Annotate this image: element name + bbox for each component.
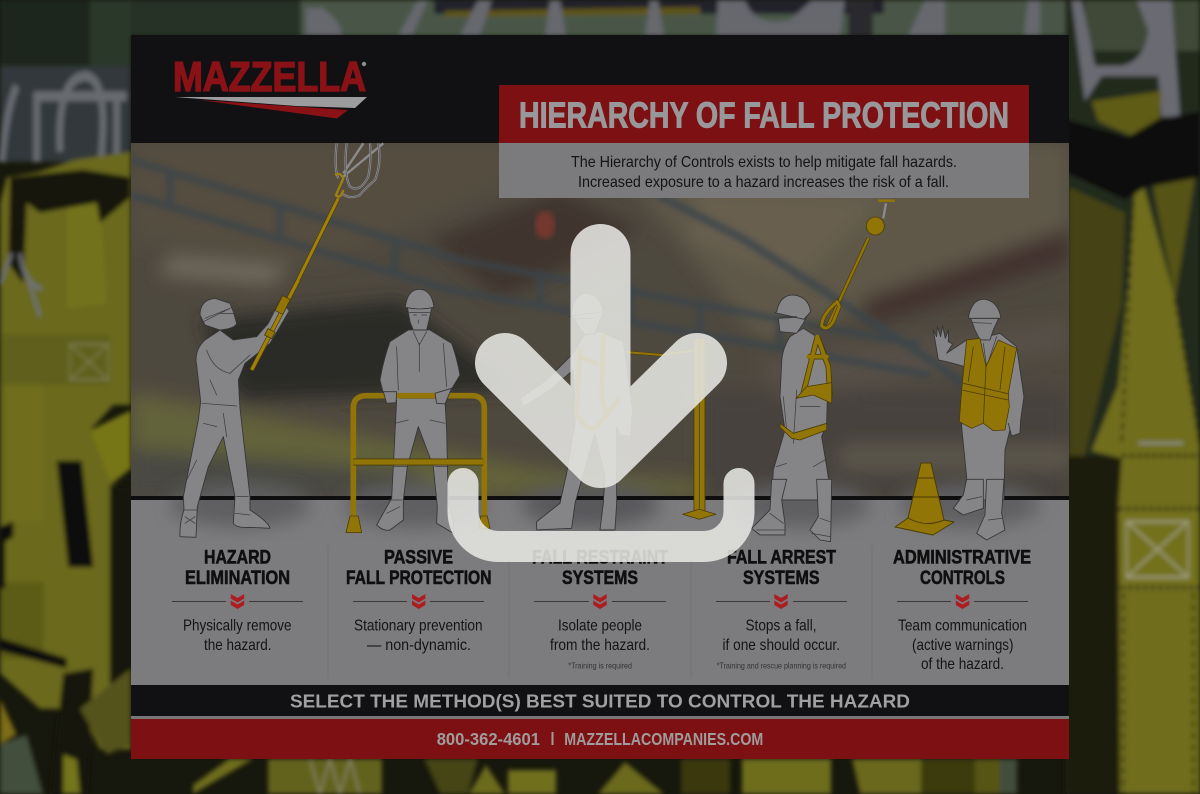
- heading: ELIMINATION: [185, 567, 290, 589]
- illustration: administrative controls worker with vest and cone: [895, 299, 1024, 540]
- description: (active warnings): [912, 637, 1014, 654]
- description: Team communication: [898, 618, 1027, 634]
- heading: PASSIVE: [384, 546, 453, 568]
- description: from the hazard.: [550, 637, 650, 654]
- illustration: worker removing hazard with pole: [180, 143, 383, 537]
- icon: download arrow overlay: [463, 254, 739, 546]
- heading: HAZARD: [204, 546, 271, 568]
- heading: [185, 546, 290, 589]
- description: of the hazard.: [921, 656, 1004, 673]
- title banner: [499, 85, 1029, 143]
- illustration: fall arrest worker with lanyard: [752, 201, 895, 542]
- call to action bar: [131, 685, 1069, 716]
- description: if one should occur.: [722, 637, 840, 654]
- description: *Training and rescue planning is required: [717, 660, 846, 670]
- heading: FALL PROTECTION: [346, 567, 492, 589]
- description: [183, 618, 292, 654]
- column: fall arrest systems: [716, 546, 847, 670]
- left side: [0, 66, 131, 794]
- call to action bar: SELECT THE METHOD(S) BEST SUITED TO CONTROL THE HAZARD: [290, 692, 910, 712]
- footer contact bar: [131, 716, 1069, 759]
- heading: SYSTEMS: [562, 567, 638, 589]
- lower grey panel: [131, 483, 1069, 685]
- logo: Mazzella: MAZZELLA: [173, 53, 366, 100]
- description: Isolate people: [558, 618, 642, 634]
- heading: FALL RESTRAINT: [532, 546, 668, 568]
- intro text box: Increased exposure to a hazard increases the risk of a fall.: [578, 174, 949, 191]
- bottom strip: [193, 759, 1017, 794]
- column: administrative controls: [893, 546, 1031, 673]
- divider with chevrons: [716, 594, 847, 609]
- description: *Training is required: [568, 660, 632, 670]
- column: hazard elimination: [172, 546, 303, 654]
- footer contact bar: 800-362-4601: [437, 729, 540, 749]
- heading: [346, 546, 492, 589]
- right side: [1065, 0, 1200, 794]
- footer contact bar: MAZZELLACOMPANIES.COM: [564, 729, 763, 749]
- poster panel: [131, 35, 1069, 759]
- heading: SYSTEMS: [743, 567, 820, 589]
- intro text box: [499, 143, 1029, 198]
- divider with chevrons: [172, 594, 303, 609]
- header band: [131, 35, 1069, 143]
- column: passive fall protection: [346, 546, 492, 654]
- description: Stops a fall,: [746, 618, 816, 634]
- pole and hook: [273, 143, 383, 330]
- heading: CONTROLS: [920, 567, 1005, 589]
- intro text box: The Hierarchy of Controls exists to help mitigate fall hazards.: [571, 154, 957, 171]
- description: [717, 618, 846, 670]
- description: [898, 618, 1027, 673]
- description: Physically remove: [183, 618, 292, 634]
- logo: Mazzella: [173, 53, 367, 118]
- heading: [532, 546, 668, 589]
- description: the hazard.: [204, 637, 272, 654]
- description: Stationary prevention: [354, 618, 482, 634]
- illustration: fall restraint worker with post: [520, 293, 716, 530]
- heading: FALL ARREST: [727, 546, 836, 568]
- heading: ADMINISTRATIVE: [893, 546, 1031, 568]
- divider with chevrons: [897, 594, 1028, 609]
- photo area: blurred warehouse ceiling: [131, 143, 1069, 497]
- description: — non-dynamic.: [367, 637, 471, 654]
- heading: [893, 546, 1031, 589]
- divider with chevrons: [534, 594, 666, 609]
- title banner: HIERARCHY OF FALL PROTECTION: [519, 94, 1009, 136]
- heading: [727, 546, 836, 589]
- illustration: worker behind guard rail: [346, 289, 490, 533]
- divider with chevrons: [353, 594, 484, 609]
- description: [354, 618, 482, 654]
- description: [550, 618, 650, 670]
- column: fall restraint systems: [532, 546, 668, 670]
